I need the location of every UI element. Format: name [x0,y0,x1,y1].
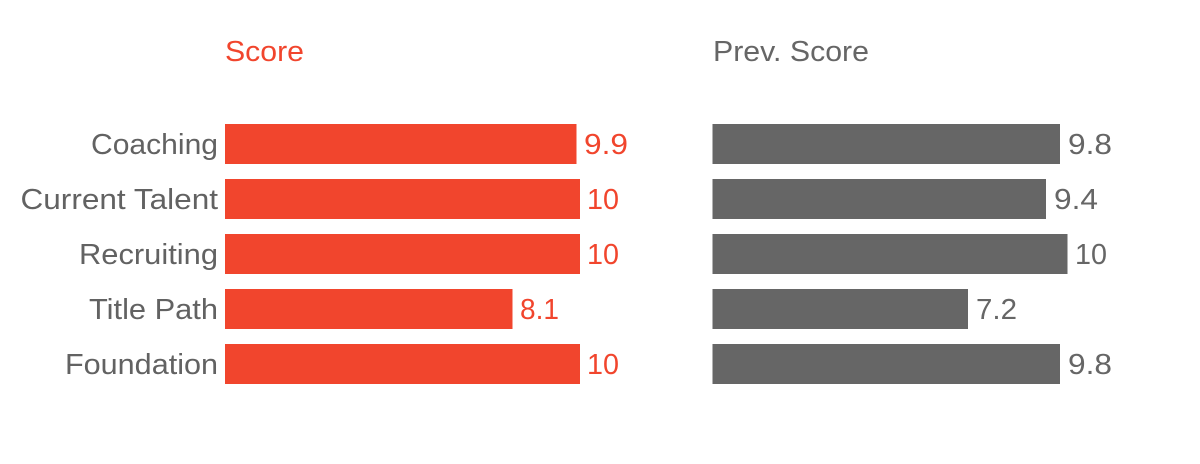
category labels: Recruiting [79,239,218,271]
category labels: Title Path [89,294,218,326]
bar chart: Prev. Score: 10 [1075,239,1107,271]
bar chart: Prev. Score [712,124,1112,384]
bar chart: Prev. Score: 9.4 [1054,184,1098,216]
bar chart: Prev. Score: 9.8 [1068,349,1112,381]
bar chart: Prev. Score: 7.2 [976,294,1017,326]
heading: Score: Score [225,36,304,68]
bar chart: Score: 10 [587,239,619,271]
bar chart: Score [225,124,628,384]
category labels: Coaching [91,129,218,161]
bar chart: Score: 9.9 [584,129,628,161]
bar chart: Score: 8.1 [520,294,559,326]
heading: Prev. Score: Prev. Score [713,36,869,68]
bar chart: Score: 10 [587,349,619,381]
category labels: Foundation [65,349,218,381]
bar chart: Prev. Score: 9.8 [1068,129,1112,161]
category labels [20,129,218,381]
category labels: Current Talent [20,184,218,216]
bar chart: Score: 10 [587,184,619,216]
